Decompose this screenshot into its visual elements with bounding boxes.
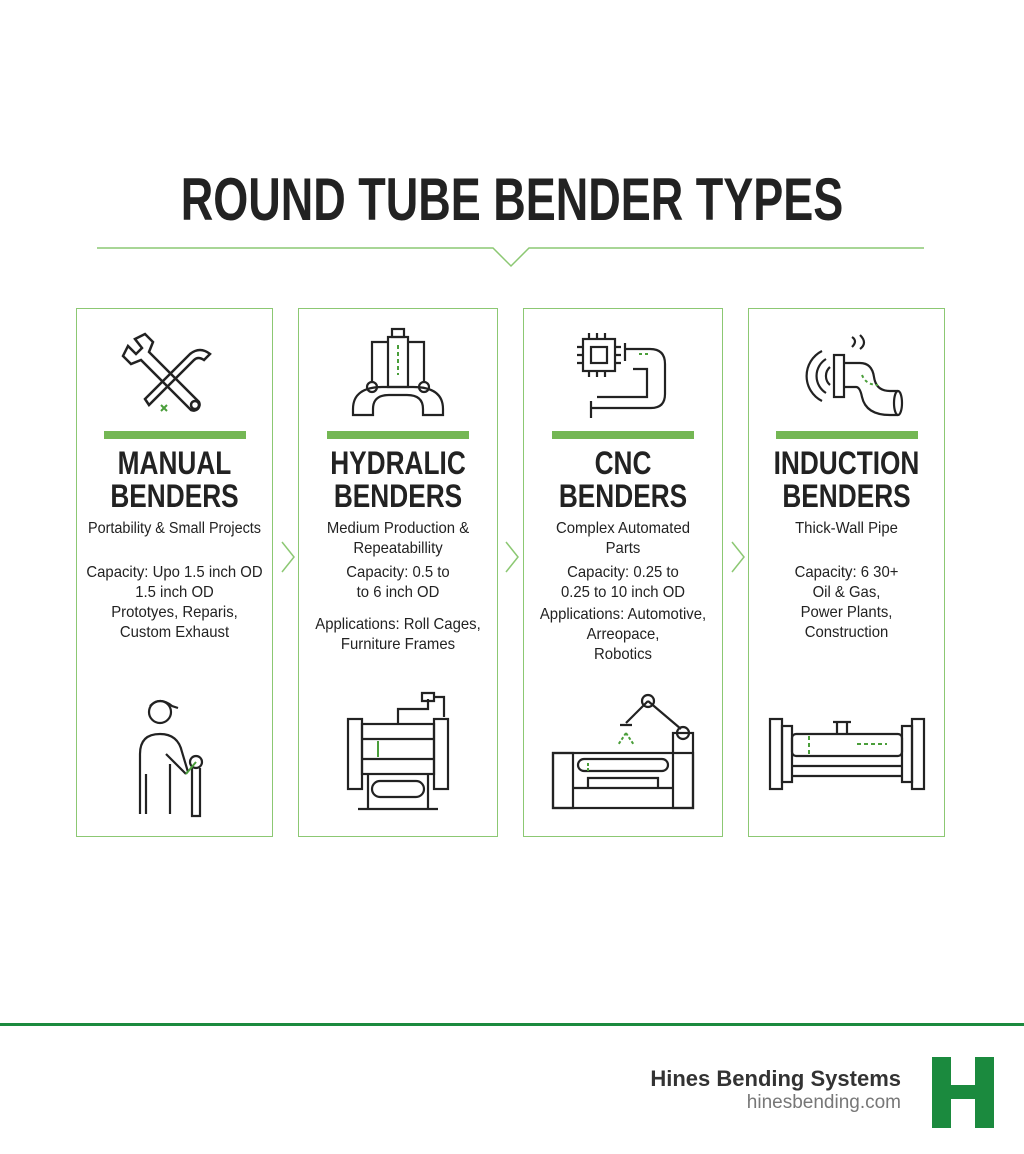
panel: induction benders: Thick-Wall Pipe [795,520,898,537]
specs text: 0.25 to 10 inch OD [561,584,685,601]
heading: INDUCTION [774,445,919,481]
title underline with notch [97,247,924,267]
footer divider [0,1023,1024,1026]
panel: manual benders [76,308,273,837]
heading [330,445,466,514]
footer brand text [650,1066,901,1113]
specs text: Custom Exhaust [120,624,229,641]
heading: BENDERS [110,478,239,514]
panel: cnc benders: Robotics [594,646,652,663]
specs text: Capacity: 0.25 to [567,564,679,581]
specs text: Power Plants, [801,604,892,621]
specs text [86,564,263,641]
specs text: Prototyes, Reparis, [111,604,238,621]
icon: induction coil pipe [806,334,904,416]
footer brand text: Hines Bending Systems [650,1066,901,1091]
heading: BENDERS [782,478,911,514]
panel: cnc benders: Parts [606,540,640,557]
arrow [506,542,519,572]
icon: hydraulic press [352,328,444,416]
arrow [282,542,295,572]
specs text: Oil & Gas, [813,584,880,601]
heading: MANUAL [118,445,231,481]
specs text: to 6 inch OD [357,584,439,601]
icon: worker with manual bender [138,700,204,818]
panel: hydraulic benders: Medium Production & [327,520,469,537]
specs text [795,564,898,641]
icon: cnc machine with robot arm [552,694,694,810]
title: ROUND TUBE BENDER TYPES [181,166,843,233]
specs text: Capacity: 0.5 to [346,564,450,581]
specs text [346,564,450,601]
panel: hydraulic benders: Applications: Roll Cages, [315,616,481,633]
panel: hydraulic benders: Repeatabillity [353,540,443,557]
specs text: Construction [805,624,888,641]
heading [774,445,919,514]
icon: induction machine [768,718,926,790]
icon: wrench and tube [122,332,212,412]
specs text [561,564,685,601]
icon: hydraulic machine [346,692,450,810]
logo: H [932,1057,994,1128]
specs text: Capacity: Upo 1.5 inch OD [86,564,263,581]
heading [110,445,239,514]
heading: BENDERS [559,478,687,514]
panel: cnc benders: Arreopace, [587,626,659,643]
heading [559,445,687,514]
panel: hydraulic benders [298,308,498,837]
icon: chip and pipe [577,333,666,418]
footer brand text: hinesbending.com [747,1092,901,1113]
heading: CNC [595,445,651,481]
arrow [732,542,745,572]
specs text: Capacity: 6 30+ [795,564,898,581]
panel: cnc benders: Applications: Automotive, [540,606,706,623]
heading: BENDERS [334,478,462,514]
heading: HYDRALIC [330,445,466,481]
panel: induction benders [748,308,945,837]
panel: cnc benders: Complex Automated [556,520,690,537]
panel: hydraulic benders: Furniture Frames [341,636,455,653]
specs text: 1.5 inch OD [135,584,214,601]
panel: manual benders: Portability & Small Projects [88,520,261,537]
panel: cnc benders [523,308,723,837]
